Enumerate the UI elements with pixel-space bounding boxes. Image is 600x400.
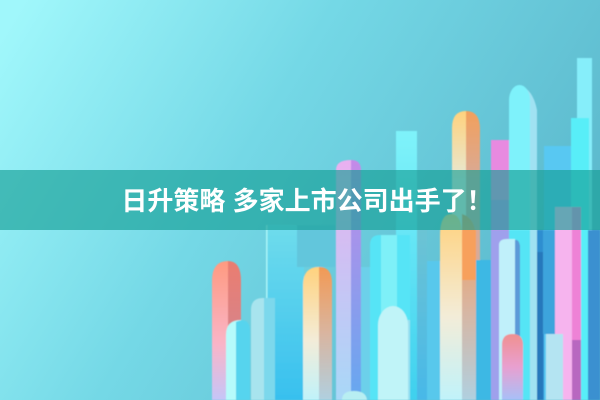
bar: yellow rounded	[303, 267, 332, 400]
bar: white front	[499, 239, 520, 400]
title: 日升策略 多家上市公司出手了！	[121, 186, 493, 216]
bar: pink right	[555, 207, 581, 400]
bar: cyan behind white	[370, 235, 410, 400]
bar: white rounded	[378, 306, 410, 400]
bar: rounded cyan with pale side	[509, 85, 537, 400]
bar: tall cyan	[396, 131, 417, 400]
back columns: centre	[266, 225, 370, 400]
bar: magenta	[491, 140, 509, 400]
bar: orange rounded back	[452, 111, 480, 400]
bar: pink-red short	[502, 334, 523, 400]
bar: lavender and purple	[336, 160, 361, 400]
bar: salmon	[212, 261, 241, 400]
title band	[0, 170, 600, 230]
bar: pale short bars left	[226, 298, 275, 400]
bar: small dome	[342, 391, 367, 400]
bars: tall right blue group	[530, 58, 600, 400]
bars: mid cyan	[417, 230, 509, 400]
bar: large yellow-orange front	[440, 214, 476, 400]
bar: pale blue short	[546, 334, 563, 400]
